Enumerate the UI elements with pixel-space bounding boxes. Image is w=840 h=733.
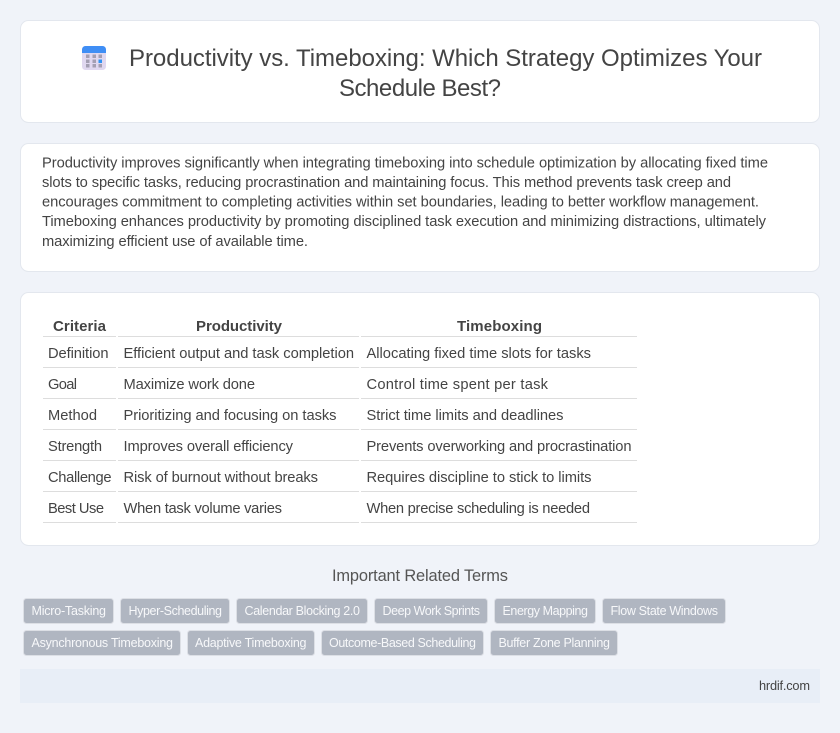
- tag: [374, 598, 488, 624]
- table header: [53, 318, 542, 335]
- tag: [602, 598, 726, 624]
- panel: summary paragraph: [20, 144, 820, 272]
- tag: Hyper-Scheduling: [128, 604, 222, 618]
- table row: Challenge: Requires discipline to stick to limits: [366, 470, 592, 486]
- table row: Strength: Improves overall efficiency: [124, 439, 294, 455]
- icon: calendar: [82, 46, 106, 70]
- title: Productivity vs. Timeboxing: Which Strategy Optimizes Your: [129, 45, 762, 72]
- text block: summary: Timeboxing enhances productivity by promoting disciplined task execution and minimizing distractions, ultimately: [42, 214, 767, 230]
- tag: [24, 630, 180, 656]
- table row: Definition: [48, 346, 591, 362]
- table row: Definition: Efficient output and task completion: [124, 346, 354, 362]
- panel: comparison table: [20, 292, 820, 546]
- table row: Goal: Goal: [48, 377, 77, 393]
- tag: Asynchronous Timeboxing: [32, 636, 173, 650]
- table row: Best Use: [48, 501, 590, 517]
- tag list: related terms: [24, 598, 726, 656]
- tag: [490, 630, 618, 656]
- tag: [188, 630, 314, 656]
- tag: Energy Mapping: [502, 604, 588, 618]
- footer: [20, 669, 820, 703]
- panel: title header: Schedule Best?: [339, 75, 501, 102]
- table row: Definition: Definition: [48, 346, 108, 362]
- table row: Best Use: When precise scheduling is needed: [366, 501, 590, 517]
- table row: Method: Prioritizing and focusing on tasks: [124, 408, 336, 424]
- tag: Adaptive Timeboxing: [195, 636, 307, 650]
- heading: related terms: Important Related Terms: [332, 567, 508, 585]
- table row: Challenge: Risk of burnout without breaks: [124, 470, 318, 486]
- panel: title header: [20, 20, 820, 122]
- tag: [322, 630, 484, 656]
- footer: hrdif.com: [759, 678, 810, 693]
- table row: Method: Method: [48, 408, 97, 424]
- table row: Strength: Prevents overworking and procrastination: [366, 439, 632, 455]
- tag: Flow State Windows: [610, 604, 718, 618]
- tag: Deep Work Sprints: [382, 604, 480, 618]
- text block: summary: encourages commitment to completing activities within set boundaries, leading to better workflow management.: [42, 195, 759, 211]
- table header: Criteria: [53, 318, 107, 335]
- table row: Method: [48, 408, 564, 424]
- table row: Challenge: [48, 470, 592, 486]
- tag: [24, 598, 114, 624]
- tag: Micro-Tasking: [32, 604, 106, 618]
- text block: summary: maximizing efficient use of available time.: [42, 234, 308, 250]
- text block: summary: [42, 156, 768, 250]
- text block: summary: slots to specific tasks, reducing procrastination and maintaining focus. This method prevents task creep and: [42, 175, 731, 191]
- table row: Method: Strict time limits and deadlines: [366, 408, 564, 424]
- table row: Goal: Maximize work done: [124, 377, 255, 393]
- table row: Challenge: Challenge: [48, 470, 112, 486]
- table row: Best Use: Best Use: [48, 501, 104, 517]
- table row: Goal: Control time spent per task: [366, 377, 549, 393]
- text block: summary: Productivity improves significantly when integrating timeboxing into schedule optimization by allocating fixed time: [42, 156, 768, 172]
- table row: Goal: [48, 377, 549, 393]
- tag: Calendar Blocking 2.0: [244, 604, 360, 618]
- table header: Timeboxing: [457, 318, 542, 335]
- table row: Definition: Allocating fixed time slots for tasks: [366, 346, 591, 362]
- tag: [120, 598, 230, 624]
- tag: [236, 598, 368, 624]
- tag: Buffer Zone Planning: [498, 636, 610, 650]
- table row: Best Use: When task volume varies: [124, 501, 282, 517]
- tag: Outcome-Based Scheduling: [329, 636, 476, 650]
- table row: Strength: Strength: [48, 439, 102, 455]
- table row: Strength: [48, 439, 632, 455]
- table header: Productivity: [196, 318, 283, 335]
- tag: [494, 598, 596, 624]
